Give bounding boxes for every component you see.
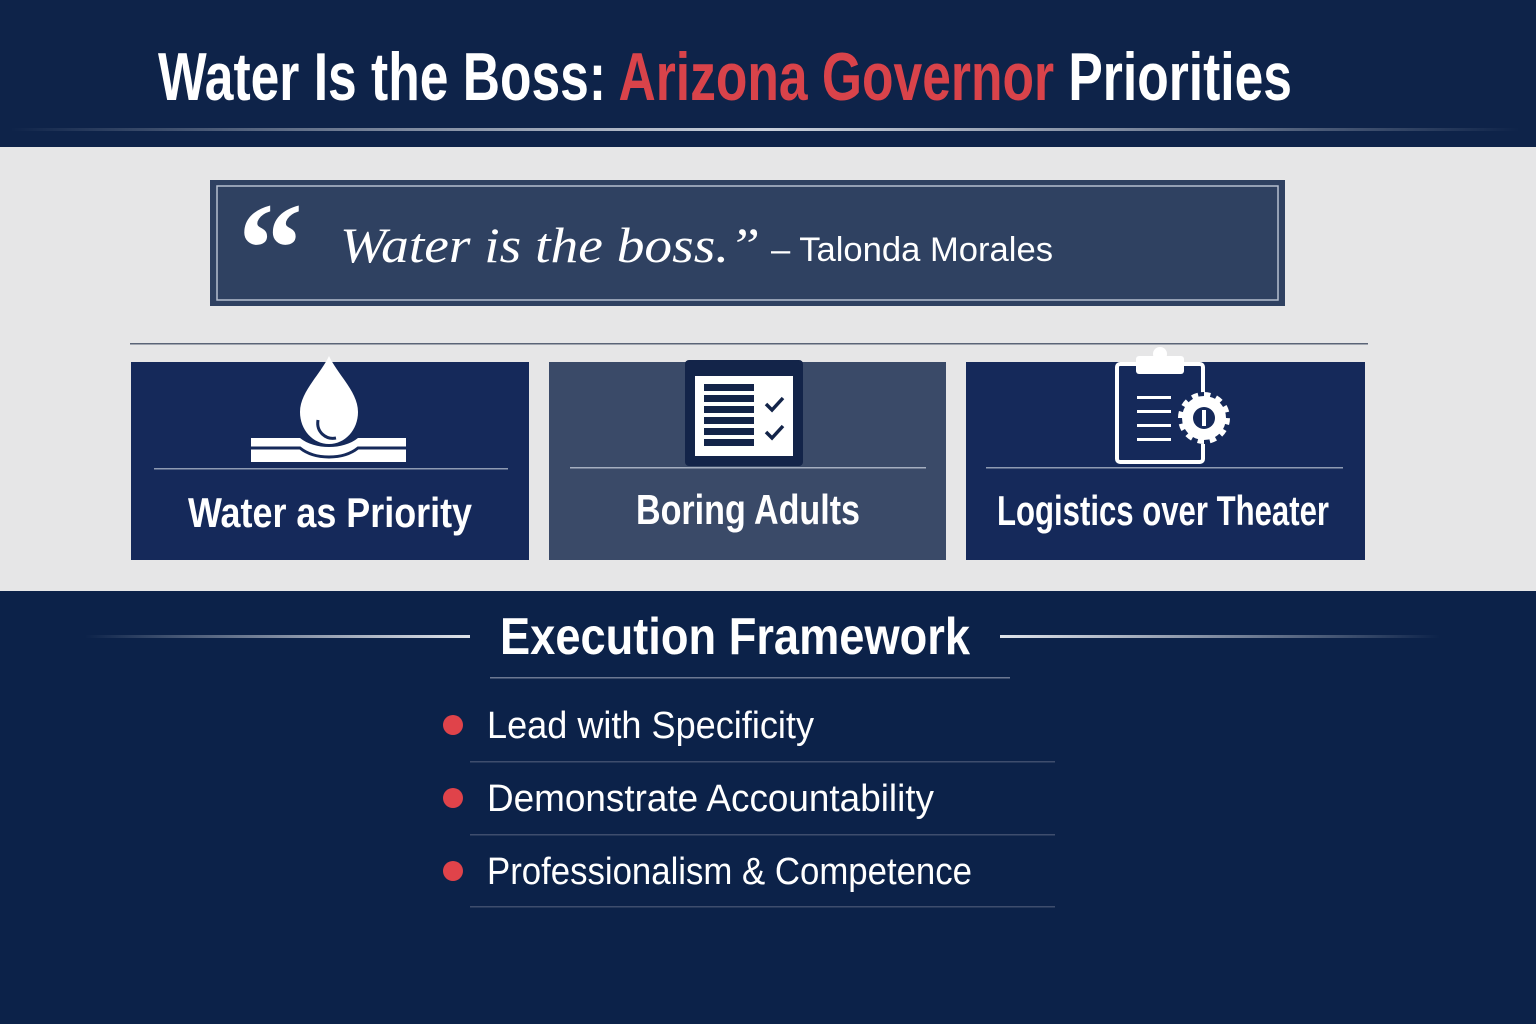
bullet list: Demonstrate Accountability — [487, 778, 934, 820]
quote box: “ — [238, 177, 303, 321]
bullet list: Lead with Specificity — [487, 705, 814, 747]
card: boring adults: Boring Adults — [636, 486, 860, 533]
section heading — [85, 608, 1440, 678]
bullet list: Professionalism & Competence — [487, 851, 972, 893]
section heading: Execution Framework — [500, 608, 970, 666]
quote box: – Talonda Morales — [771, 231, 1053, 269]
card: boring adults — [549, 360, 946, 560]
header band — [0, 0, 1536, 147]
quote box: Water is the boss.” — [340, 217, 760, 273]
card: logistics over theater — [966, 347, 1365, 560]
card: logistics over theater: Logistics over Theater — [997, 487, 1329, 534]
card: water as priority — [131, 356, 529, 560]
card: water as priority: Water as Priority — [188, 489, 473, 536]
bullet list — [443, 705, 1055, 908]
quote box — [210, 177, 1285, 321]
title: Water Is the Boss: Arizona Governor Priorities — [158, 39, 1292, 115]
light band — [0, 147, 1536, 591]
